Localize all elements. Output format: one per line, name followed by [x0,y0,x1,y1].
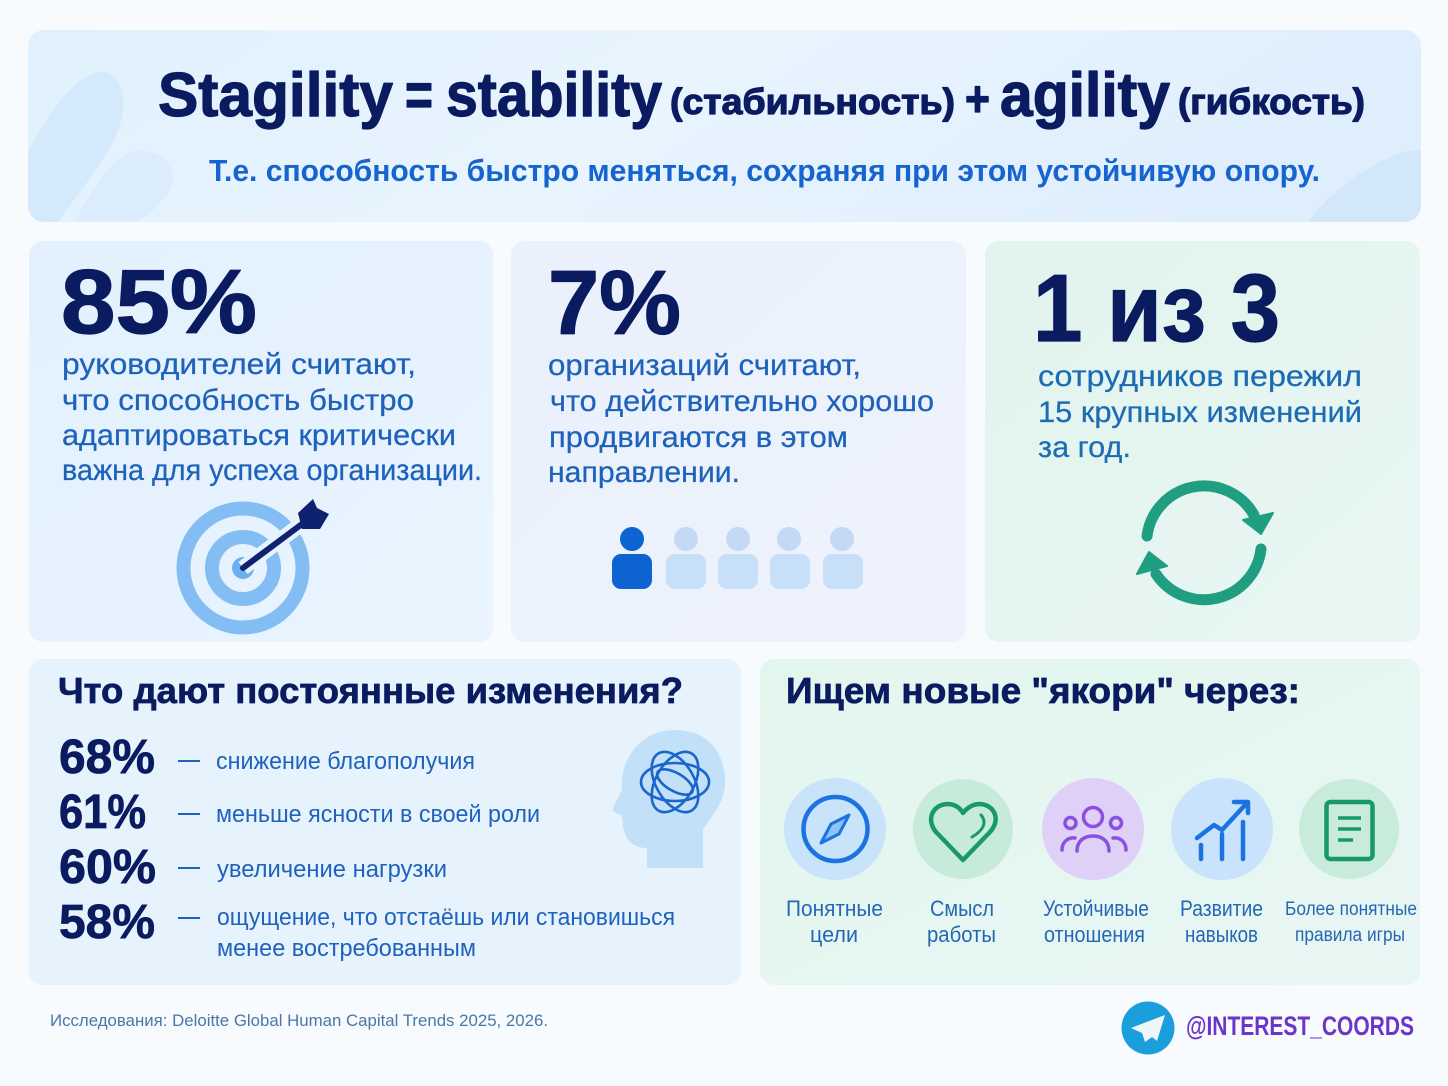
item: meaning of work: Смысл [930,896,994,921]
stat row: 60%: 60% [59,841,156,894]
title [158,61,1365,130]
icon: five people, one highlighted [612,527,863,589]
item: stable relationships: Устойчивые [1043,896,1149,921]
title: agility [1000,61,1170,130]
item: stable relationships: отношения [1044,922,1145,947]
heading: Что дают постоянные изменения? [58,670,683,711]
stat row: 68% [59,731,475,784]
stat row: 61%: меньше ясности в своей роли [216,801,540,828]
text: 85% description: руководителей считают, [62,348,416,381]
item: skills development [1171,778,1273,947]
title: (гибкость) [1178,81,1365,122]
item: clear goals: Понятные [786,896,883,921]
title: stability [446,61,662,130]
text: 7% description: направлении. [548,456,740,489]
footer source: Исследования: Deloitte Global Human Capital Trends 2025, 2026. [50,1011,548,1030]
item: clearer rules [1285,779,1417,946]
item: skills development: Развитие [1180,896,1263,921]
panel: what constant changes give [29,659,741,985]
text: 85% description: адаптироваться критически [62,419,456,452]
stat row: 61% [59,786,540,839]
stat row: 61%: 61% [59,786,146,839]
text: 1 of 3 description [1038,360,1362,464]
stat: 85%: 85% [61,252,257,353]
stat row: 68%: 68% [59,731,155,784]
icon: target with arrow [184,499,329,628]
stat row: 58%: ощущение, что отстаёшь или становишься [217,904,675,931]
icon: refresh arrows [1137,486,1273,600]
icon: head with tangled thoughts [613,730,725,868]
text: 1 of 3 description: 15 крупных изменений [1038,396,1362,429]
item: clearer rules: правила игры [1295,925,1405,946]
stat: 7%: 7% [548,253,681,354]
stat row: 60% [59,841,447,894]
text: 7% description: организаций считают, [548,349,861,382]
text: 1 of 3 description: за год. [1038,431,1131,464]
title: + [965,71,990,127]
item: meaning of work [913,779,1013,947]
panel: new anchors [760,659,1420,985]
icon: telegram [1122,1002,1174,1054]
text: 85% description [62,348,482,487]
item: stable relationships [1042,778,1149,947]
title: (стабильность) [670,81,955,122]
panel: 85 percent [29,241,493,642]
stat row: 58%: 58% [59,896,155,949]
text: 7% description [548,349,934,489]
title: Stagility [158,61,393,130]
subtitle: Т.е. способность быстро меняться, сохраняя при этом устойчивую опору. [209,153,1320,188]
stat row: 60%: увеличение нагрузки [217,856,447,883]
stat row: 58% [59,896,675,962]
item: clear goals: цели [810,922,858,947]
panel: 7 percent [511,241,966,642]
text: 85% description: важна для успеха организации. [62,454,482,487]
item: skills development: навыков [1185,922,1258,947]
title: = [405,61,433,130]
text: 85% description: что способность быстро [62,384,414,417]
stat row: 58%: менее востребованным [217,935,476,962]
panel: 1 of 3 [985,241,1420,642]
item: meaning of work: работы [927,922,996,947]
panel: header [28,30,1421,222]
stat: 1 из 3: 1 из 3 [1033,255,1280,362]
heading: Ищем новые "якори" через: [786,670,1300,711]
item: clear goals [784,778,886,947]
stat row: 68%: снижение благополучия [216,748,475,775]
text: 7% description: что действительно хорошо [550,385,934,418]
text: 1 of 3 description: сотрудников пережил [1038,360,1362,393]
text: 7% description: продвигаются в этом [549,421,848,454]
item: clearer rules: Более понятные [1285,899,1417,920]
